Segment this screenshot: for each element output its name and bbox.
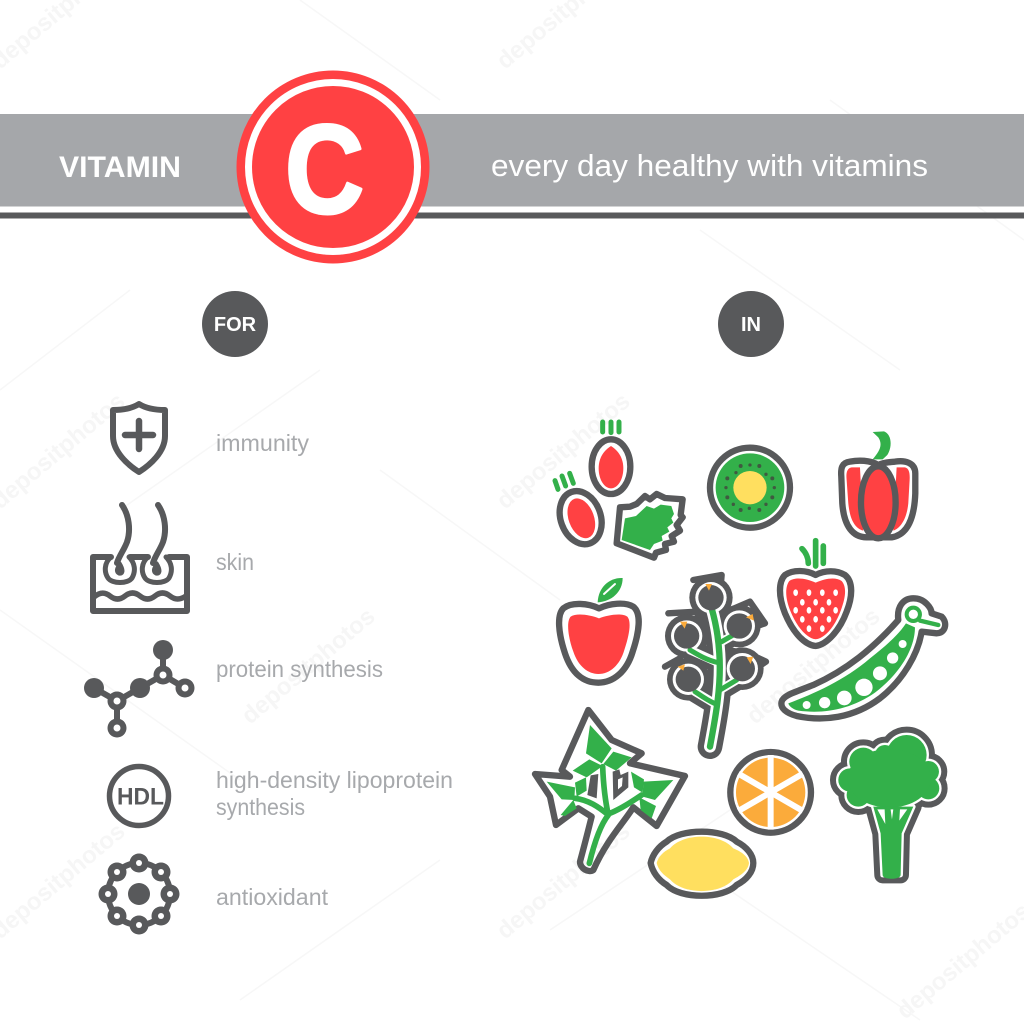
- label: high-density lipoprotein synthesis: high-density lipoprotein: [216, 767, 453, 793]
- label: protein synthesis: protein synthesis: [216, 656, 383, 682]
- badge: FOR: FOR: [214, 314, 257, 336]
- white inset: [671, 582, 758, 747]
- icon: HDL: HDL: [117, 784, 164, 810]
- berries: [674, 585, 755, 692]
- label: skin: skin: [216, 549, 254, 575]
- icon: HDL: [110, 766, 168, 826]
- label: antioxidant: antioxidant: [216, 884, 329, 910]
- serrated leaf: [617, 494, 683, 558]
- text: depositphotos: [492, 388, 636, 515]
- top berry: [592, 422, 630, 494]
- icon: bell pepper: [841, 431, 915, 538]
- icon: pea pod: [781, 598, 945, 718]
- label: high-density lipoprotein synthesis: synthesis: [216, 794, 305, 820]
- tagline: every day healthy with vitamins: [491, 149, 928, 183]
- left berry: [553, 473, 609, 550]
- icon: orange slice: [730, 752, 811, 833]
- badge: IN: [718, 291, 784, 357]
- calyx: [678, 584, 754, 671]
- icon: molecule: [84, 640, 194, 738]
- icon: broccoli: [838, 735, 939, 879]
- green stems: [690, 608, 737, 747]
- badge: IN: IN: [741, 314, 761, 336]
- icon: shield: [113, 404, 165, 472]
- text: depositphotos: [492, 818, 636, 945]
- text: depositphotos: [742, 603, 886, 730]
- icon: skin and hair follicles: [93, 505, 187, 611]
- text: depositphotos: [237, 603, 381, 730]
- icon: kiwi: [710, 448, 790, 528]
- vitamin C badge: [236, 70, 430, 264]
- icon: strawberry: [780, 541, 851, 646]
- icon: antioxidant: [98, 854, 180, 934]
- badge: FOR: [202, 291, 268, 357]
- icon: lemon: [651, 832, 753, 896]
- outline silhouette: [665, 575, 766, 747]
- heading: VITAMIN: VITAMIN: [59, 151, 181, 184]
- label: immunity: immunity: [216, 430, 310, 456]
- header banner: [0, 114, 1024, 218]
- icon: blackcurrant branch: [665, 575, 766, 747]
- vitamin C badge: C: [285, 100, 364, 241]
- icon: apple: [559, 578, 639, 683]
- icon: rose hip berries with leaf: [553, 422, 683, 558]
- icon: leafy herb sprig: [535, 710, 685, 871]
- label: high-density lipoprotein synthesis: [216, 767, 453, 820]
